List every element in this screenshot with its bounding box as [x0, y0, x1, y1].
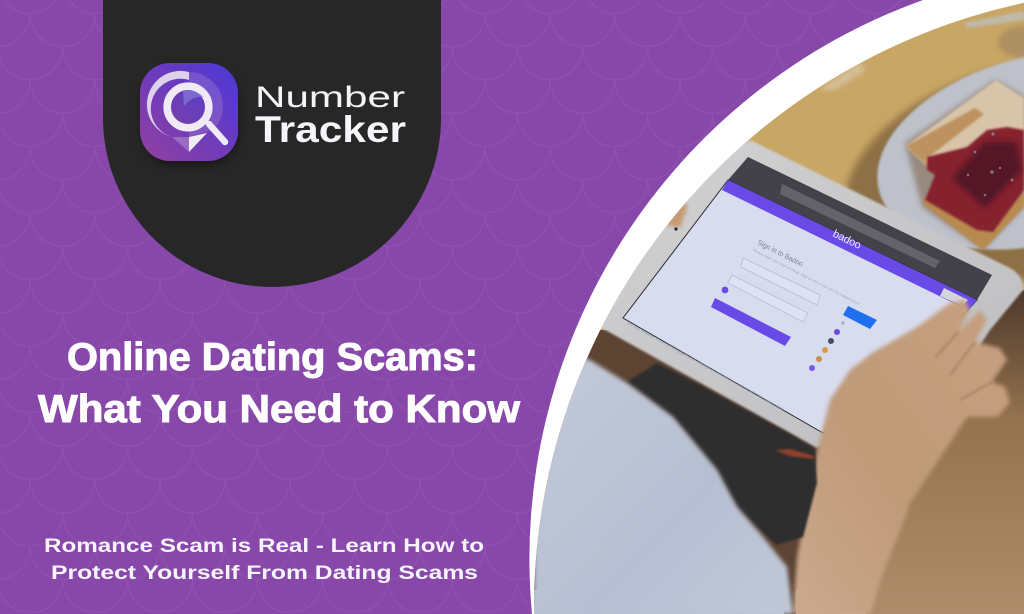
social login icons [809, 321, 845, 371]
red detail under tablet [775, 449, 814, 459]
tablet frame [590, 140, 1023, 448]
panel: photo of tablet showing Badoo sign-in [534, 0, 1024, 614]
subtitle: Romance Scam is Real - Learn How to [44, 535, 484, 557]
tablet [590, 140, 1023, 448]
facebook button [843, 306, 877, 329]
hand [793, 300, 1010, 614]
title: What You Need to Know [38, 388, 521, 431]
address bar [780, 184, 940, 268]
sweater [627, 363, 817, 545]
sign in helper text: Please enter your login or email. Sign up here if you are not registered yet. [753, 248, 861, 306]
title [38, 336, 521, 431]
tablet dark browser bar [728, 157, 992, 300]
password field [728, 275, 808, 322]
plate with toast [844, 56, 1024, 284]
sign in heading: Sign in to Badoo [756, 238, 805, 268]
subtitle [44, 535, 484, 584]
wordmark: Tracker: Tracker [255, 109, 406, 150]
sign in button [711, 298, 791, 346]
sign up button [940, 288, 968, 306]
purple header bar [722, 180, 977, 310]
skin and background below tablet [534, 290, 1024, 614]
icon: magnifier app icon [140, 63, 238, 164]
white crescent arc [529, 0, 1024, 614]
dark logo panel [103, 0, 441, 287]
brand name: badoo [831, 228, 863, 252]
shirt [534, 340, 793, 614]
table surface [596, 2, 1024, 340]
login field [741, 258, 820, 305]
tablet screen [623, 180, 977, 433]
logo [140, 63, 406, 164]
title: Online Dating Scams: [67, 336, 478, 379]
cookie notice: We use cookies. If you do not adjust your settings we assume you are ok with this. Learn more [627, 321, 784, 411]
remember checkbox [722, 287, 728, 293]
wordmark: Number: Number [255, 81, 405, 114]
subtitle: Protect Yourself From Dating Scams [51, 562, 478, 584]
